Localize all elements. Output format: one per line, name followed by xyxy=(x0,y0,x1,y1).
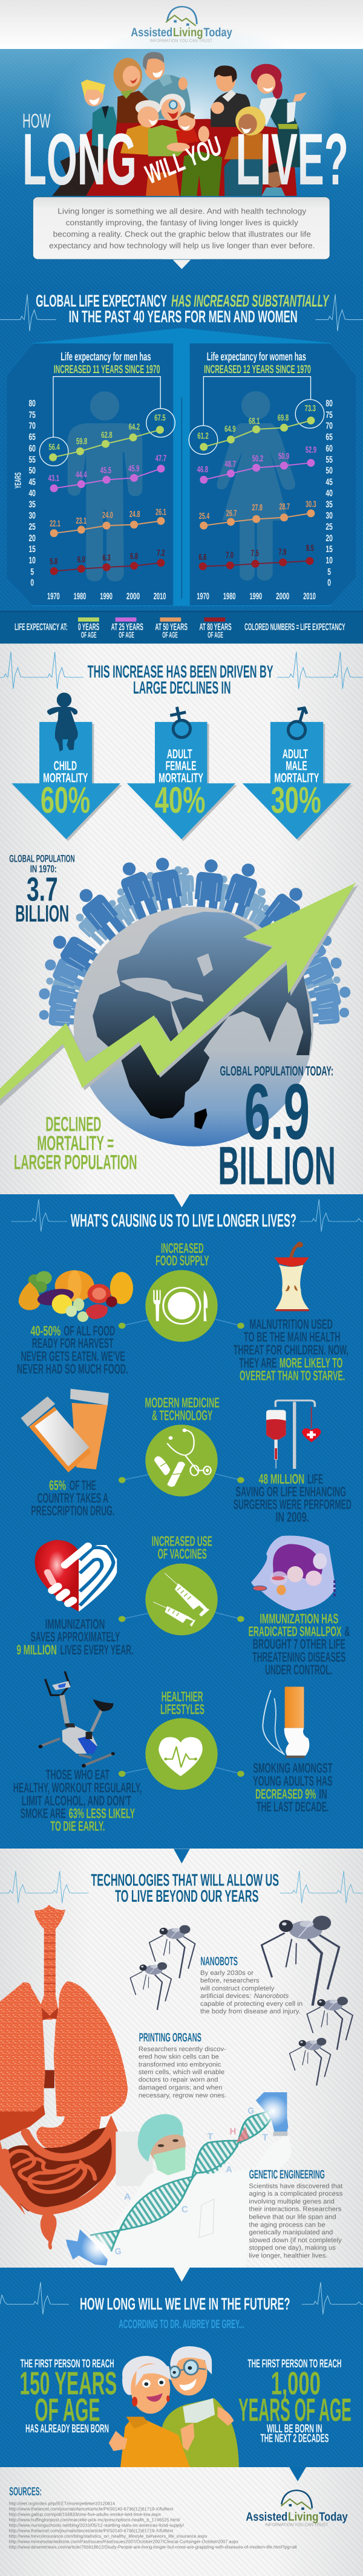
title: LONG xyxy=(22,118,137,200)
illustration: scientist with DNA helix: A xyxy=(226,2165,232,2174)
axis labels: 10 xyxy=(325,555,333,565)
icon: male symbol xyxy=(288,708,307,738)
series: age 80 xyxy=(50,548,165,575)
series: age 0: 64.2 xyxy=(129,422,140,432)
future and sources: THE FIRST PERSON TO REACH xyxy=(21,2357,114,2370)
panel: men chart: INCREASED 11 YEARS SINCE 1970 xyxy=(54,363,160,376)
icon: plate xyxy=(145,1270,218,1342)
population today xyxy=(218,1063,336,1196)
series: age 80: 6.8 xyxy=(130,551,138,561)
panel: vaccines: LIVES EVERY YEAR. xyxy=(60,1642,133,1657)
panel: adult male mortality: MALE xyxy=(286,758,307,773)
text block: 1,000 years xyxy=(238,2357,352,2445)
series: age 50: 30.3 xyxy=(306,499,316,509)
axis labels: 75 xyxy=(28,409,36,420)
panel: women chart xyxy=(189,350,324,581)
text block: genetic engineering: Scientists have discovered that xyxy=(249,2182,342,2190)
sources: http://www.trevcoinsurance.com/blog/statistics_on_healthy_lifestyle_behaviors_life_insurance.aspx xyxy=(9,2534,207,2539)
text block: genetic engineering: involving multiple genes and xyxy=(249,2197,335,2205)
text block: genetic engineering xyxy=(249,2168,342,2259)
panel: food supply: 40-50% xyxy=(31,1323,60,1338)
future and sources: 150 YEARS xyxy=(20,2365,117,2401)
panel: lifestyles: SMOKE ARE xyxy=(21,1806,66,1821)
axis labels: 20 xyxy=(325,533,333,543)
text block: printing organs: stem cells, which will enable xyxy=(139,2068,224,2075)
callout: declined mortality: DECLINED xyxy=(45,1113,101,1136)
logo: INFORMATION YOU CAN TRUST xyxy=(265,2522,328,2527)
text block: printing organs: ered how skin cells can be xyxy=(139,2053,219,2060)
axis labels: 1990 xyxy=(100,591,113,601)
axis labels: 45 xyxy=(28,476,36,487)
illustration: exercise bike xyxy=(39,1671,115,1768)
axis labels: 30 xyxy=(325,510,333,521)
text block: printing organs: doctors to repair worn and xyxy=(139,2076,218,2083)
panel: food supply: OF ALL FOOD xyxy=(64,1323,115,1338)
title xyxy=(22,109,348,200)
title: HOW xyxy=(22,109,51,132)
title: WILL YOU xyxy=(142,130,225,190)
future and sources xyxy=(9,2346,352,2549)
series: age 25: 44.4 xyxy=(76,470,87,480)
panel: adult female mortality: 40% xyxy=(155,779,205,821)
text block: nanobots: NANOBOTS xyxy=(200,1954,238,1968)
panel: child mortality: 60% xyxy=(41,779,90,821)
axis labels: 35 xyxy=(325,499,333,509)
sources: http://www.huffingtonpost.com/marcelle-pick-mc/prescriptions-health_b_1746525.html/ xyxy=(9,2517,180,2522)
axis labels xyxy=(13,398,333,601)
axis labels: 1970 xyxy=(47,591,60,601)
header and hero xyxy=(22,7,348,269)
heading xyxy=(88,662,273,698)
axis labels: 55 xyxy=(28,455,36,465)
series: age 50 xyxy=(199,499,316,530)
text block: printing organs xyxy=(139,2031,226,2099)
icon: cigarette xyxy=(263,1686,309,1758)
subheading: food supply xyxy=(155,1240,209,1269)
logo: INFORMATION YOU CAN TRUST xyxy=(150,38,212,43)
icon: woman silhouette xyxy=(217,391,295,581)
logo: Assisted xyxy=(246,2509,287,2523)
section background: sources xyxy=(0,2467,363,2576)
text block: nanobots xyxy=(200,1954,302,2015)
text block: genetic engineering: genetically manipulated and xyxy=(249,2228,333,2236)
series: age 0: 69.8 xyxy=(278,413,289,423)
section background: future xyxy=(0,2268,363,2467)
series: age 50: 26.7 xyxy=(226,509,237,518)
intro text box: Living longer is something we all desire. And with health technology xyxy=(57,207,306,215)
panel: food supply xyxy=(17,1242,348,1384)
axis labels: 1980 xyxy=(74,591,86,601)
series: age 80: 6.6 xyxy=(198,552,206,562)
text block: printing organs: transformed into embryonic xyxy=(139,2061,221,2068)
panel: medicine: IN 2009. xyxy=(275,1509,309,1525)
panel: lifestyles: LIMIT ALCOHOL, AND DON'T xyxy=(22,1793,131,1808)
legend: LIFE EXPECTANCY AT: xyxy=(15,622,68,633)
illustration: scientist with DNA helix: A xyxy=(124,2191,131,2202)
text block: nanobots: the body from disease and injury. xyxy=(200,2008,301,2015)
intro text box xyxy=(33,197,330,269)
intro text box: becoming a reality. Check out the graphic below that illustrates our life xyxy=(53,230,311,239)
population 1970: GLOBAL POPULATION xyxy=(9,853,75,864)
panel: medicine: & TECHNOLOGY xyxy=(152,1407,212,1423)
legend: OF AGE xyxy=(208,630,223,640)
text block: genetic engineering: slowed down (if not completely xyxy=(249,2236,342,2243)
logo xyxy=(246,2490,348,2527)
panel: adult male mortality: ADULT xyxy=(283,746,308,761)
icon: baby xyxy=(47,692,78,752)
text block: 1,000 years: 1,000 xyxy=(271,2365,321,2401)
illustration: fruit and vegetables xyxy=(19,1270,133,1322)
population 1970: IN 1970: xyxy=(30,864,57,874)
panel: adult male mortality xyxy=(243,708,353,841)
panel: adult female mortality: FEMALE xyxy=(166,758,196,773)
panel: lifestyles: HEALTHY, WORKOUT REGULARLY, xyxy=(13,1780,142,1795)
illustration: cell xyxy=(251,1536,336,1610)
axis labels: 40 xyxy=(325,488,333,498)
text block: printing organs: PRINTING ORGANS xyxy=(139,2031,201,2044)
series: age 0: 59.8 xyxy=(76,437,87,446)
panel: medicine: PRESCRIPTION DRUG. xyxy=(31,1503,114,1518)
panel: lifestyles: LIFESTYLES xyxy=(160,1701,204,1717)
series: age 50: 23.1 xyxy=(76,516,87,526)
panel: vaccines: IMMUNIZATION xyxy=(45,1616,105,1631)
legend xyxy=(0,611,363,643)
illustration: people around globe xyxy=(37,856,353,1028)
series: age 25 xyxy=(48,454,166,492)
panel: child mortality: CHILD xyxy=(54,758,77,773)
axis labels: 35 xyxy=(28,499,36,509)
life expectancy section xyxy=(0,291,363,643)
text block: nanobots: before, researchers xyxy=(200,1977,260,1984)
text block: genetic engineering: live longer, healthier lives. xyxy=(249,2252,327,2259)
chart backdrop xyxy=(7,328,356,606)
series: age 0: 62.8 xyxy=(101,431,113,440)
section background: technologies xyxy=(0,1849,363,2268)
series: age 80: 6.3 xyxy=(103,553,111,562)
panel: medicine: OF THE xyxy=(70,1478,96,1493)
icon: man silhouette xyxy=(68,391,142,581)
panel: food supply: THEY ARE xyxy=(239,1355,276,1370)
illustration: scientist with DNA helix: G xyxy=(247,2106,254,2116)
sources: http://www.thelancet.com/journals/lancet/article/PIIS0140-6736(12)61719-X/fulltext xyxy=(9,2506,173,2511)
series: age 0: 64.9 xyxy=(224,424,236,434)
illustration: family on a sofa xyxy=(52,52,307,196)
axis labels: 65 xyxy=(28,432,36,442)
text block: nanobots: By early 2030s or xyxy=(200,1969,253,1976)
subheading: food supply: INCREASED xyxy=(161,1240,204,1256)
text block: genetic engineering: believe that our life span and xyxy=(249,2213,336,2220)
sources: http://www.gallup.com/poll/156833/one-five-adults-smoke-tied-time-low.aspx xyxy=(9,2512,161,2517)
axis labels: 0 xyxy=(327,577,331,588)
subheading: vaccines xyxy=(152,1534,212,1562)
causes part 1 xyxy=(17,1242,352,1562)
axis labels: 60 xyxy=(325,443,333,454)
sources: http://ieet.org/index.php/IEET/more/pelletier20120814 xyxy=(9,2501,115,2506)
legend: AT 80 YEARS xyxy=(199,622,232,633)
series: age 50 xyxy=(50,507,166,537)
population 1970: 3.7 xyxy=(27,870,58,908)
axis labels: 0 xyxy=(30,577,34,588)
icon: stethoscope and pills xyxy=(145,1425,218,1497)
panel: medicine: LIFE xyxy=(307,1471,323,1486)
legend: OF AGE xyxy=(162,630,178,640)
causes part 1: INCREASED USE xyxy=(152,1534,212,1549)
series: age 25 xyxy=(197,445,316,484)
panel: vaccines: SAVES APPROXIMATELY xyxy=(31,1629,120,1645)
panel: vaccines xyxy=(17,1536,350,1677)
panel: men chart xyxy=(39,350,175,581)
text block: 150 years xyxy=(20,2357,117,2435)
axis labels: 2010 xyxy=(154,591,166,601)
sources: SOURCES: xyxy=(9,2485,42,2498)
sources: http://www.thelancet.com/journals/lancet/article/PIIS0140-6736(12)61719-X/fulltext xyxy=(9,2528,173,2533)
illustration: globe xyxy=(74,906,313,1147)
panel: medicine: 65% xyxy=(49,1478,66,1493)
axis labels: YEARS xyxy=(13,472,23,489)
axis labels: 1980 xyxy=(223,591,236,601)
icon: IV drip stand xyxy=(266,1400,321,1469)
text block: printing organs: necessary, regrow new ones. xyxy=(139,2092,226,2099)
illustration: scientist with DNA helix: T xyxy=(207,2132,213,2141)
series: age 80 xyxy=(198,544,314,570)
icon: heart with pulse xyxy=(145,1718,218,1790)
section background: header xyxy=(0,0,363,49)
series: age 80: 7.5 xyxy=(251,548,259,558)
axis labels: 70 xyxy=(325,421,333,431)
series: age 50: 28.7 xyxy=(279,502,290,512)
series: age 80: 8.5 xyxy=(306,544,314,553)
icon: syringes xyxy=(145,1564,218,1635)
illustration: pill bottles xyxy=(21,1389,109,1472)
panel: adult male mortality: 30% xyxy=(271,779,321,821)
series: age 25: 50.9 xyxy=(278,451,289,461)
legend: 0 YEARS xyxy=(78,622,99,633)
panel: lifestyles: 63% LESS LIKELY xyxy=(69,1806,135,1821)
causes part 2 xyxy=(13,1536,350,1834)
illustration: digestive organs xyxy=(0,2092,127,2249)
panel: child mortality: MORTALITY xyxy=(43,770,88,785)
text block: genetic engineering: the aging process can be xyxy=(249,2221,325,2228)
text block: nanobots: will construct completely xyxy=(200,1985,274,1992)
heading xyxy=(36,291,330,326)
series: age 0: 73.3 xyxy=(305,403,316,414)
series: age 25: 43.1 xyxy=(48,473,59,483)
population results xyxy=(0,1063,363,1269)
section background: mortality and population xyxy=(0,643,363,1194)
series: age 0: 61.2 xyxy=(197,431,209,441)
panel: medicine: 48 MILLION xyxy=(259,1471,304,1486)
series: age 80: 6.0 xyxy=(77,555,85,564)
panel: food supply: NEVER GETS EATEN. WE'VE xyxy=(21,1348,125,1364)
text block: nanobots: artificial devices: xyxy=(200,1992,251,1999)
illustration: trachea and lungs xyxy=(0,1905,128,2116)
axis labels: 2000 xyxy=(276,591,289,601)
legend: OF AGE xyxy=(81,630,97,640)
population results: FOOD SUPPLY xyxy=(155,1253,209,1269)
text block: printing organs: Researchers recently discov- xyxy=(139,2045,226,2052)
series: age 25: 45.9 xyxy=(128,464,139,473)
axis labels: 40 xyxy=(28,488,36,498)
series: age 50: 26.1 xyxy=(155,507,166,517)
callout: declined mortality xyxy=(14,1113,137,1174)
icon: gloved hands xyxy=(66,2092,288,2266)
axis labels: 1970 xyxy=(197,591,209,601)
legend: AT 50 YEARS xyxy=(155,622,188,633)
text block: printing organs: damaged organs; and when xyxy=(139,2084,222,2091)
axis labels: 55 xyxy=(325,455,333,465)
icon: apple core xyxy=(274,1242,309,1311)
series: age 0: 68.1 xyxy=(249,416,260,426)
axis labels: 25 xyxy=(28,522,36,532)
panel: lifestyles: THOSE WHO EAT xyxy=(46,1767,110,1783)
axis labels: 60 xyxy=(28,443,36,454)
series: age 80: 7.2 xyxy=(157,548,165,558)
series: age 25: 46.8 xyxy=(197,464,208,474)
axis labels: 5 xyxy=(327,567,331,577)
axis labels: 80 xyxy=(28,398,36,409)
sources: http://www.deseretnews.com/article/765618612/Study-People-are-living-longer-but-more-are-grappling-with-diseases-of-modern-life.html?pg=all xyxy=(9,2545,297,2549)
heading: LARGE DECLINES IN xyxy=(133,678,231,698)
axis labels: 70 xyxy=(28,421,36,431)
panel: men chart: Life expectancy for men has xyxy=(60,350,151,363)
panel: food supply: NEVER HAD SO MUCH FOOD. xyxy=(17,1361,128,1377)
series: age 25: 50.2 xyxy=(252,454,263,463)
logo: Living xyxy=(288,2509,319,2523)
panel: adult female mortality xyxy=(127,707,237,841)
panel: lifestyles xyxy=(13,1671,332,1834)
causes part 1: OF VACCINES xyxy=(158,1546,207,1562)
panel: lifestyles: TO DIE EARLY. xyxy=(50,1818,105,1834)
panel: adult male mortality: MORTALITY xyxy=(274,770,319,785)
axis labels: 2010 xyxy=(303,591,316,601)
text block: genetic engineering: aging is a complicated process xyxy=(249,2190,342,2197)
axis labels: 80 xyxy=(325,398,333,409)
illustration: scientist with DNA helix: H xyxy=(230,2126,236,2136)
illustration: scientist with DNA helix: T xyxy=(262,2132,268,2142)
panel: medicine: MODERN MEDICINE xyxy=(145,1394,220,1410)
series: age 25: 48.7 xyxy=(225,459,236,469)
series: age 50: 25.4 xyxy=(199,511,209,521)
text block: genetic engineering: their interactions. Researchers xyxy=(249,2205,341,2213)
icon: female symbol xyxy=(170,707,191,738)
series: age 0 xyxy=(197,403,316,451)
panel: adult female mortality: ADULT xyxy=(167,746,192,761)
technologies part 1 xyxy=(0,1849,363,2116)
series: age 25: 45.5 xyxy=(100,466,111,475)
legend: OF AGE xyxy=(119,630,134,640)
sources xyxy=(9,2485,297,2549)
axis labels: 2000 xyxy=(126,591,140,601)
logo: Today xyxy=(203,25,232,39)
axis labels: 5 xyxy=(30,567,34,577)
illustration: scientist with DNA helix: C xyxy=(182,2205,188,2214)
series: age 0 xyxy=(48,413,166,461)
logo: Living xyxy=(173,25,203,39)
legend: AT 25 YEARS xyxy=(111,622,143,633)
axis labels: 50 xyxy=(28,466,36,476)
population 1970: BILLION xyxy=(15,900,69,926)
logo xyxy=(131,7,232,43)
axis labels: 50 xyxy=(325,466,333,476)
axis labels: 10 xyxy=(28,555,36,565)
series: age 80: 7.9 xyxy=(278,547,286,557)
axis labels: 1990 xyxy=(249,591,262,601)
panel: lifestyles: IN xyxy=(319,1786,327,1801)
panel: child mortality xyxy=(11,692,122,841)
panel: vaccines: 9 MILLION xyxy=(17,1642,57,1657)
axis labels: 75 xyxy=(325,409,333,420)
panel: medicine: COUNTRY TAKES A xyxy=(38,1491,108,1506)
section background: hero and life expectancy xyxy=(0,49,363,643)
axis labels: 65 xyxy=(325,432,333,442)
illustration: nanobots xyxy=(130,1916,353,2086)
icon: heart with bandage stripes xyxy=(35,1540,117,1612)
intro text box: expectancy and how technology will help us live longer than ever before. xyxy=(49,241,315,250)
mortality and population section xyxy=(0,652,363,1147)
series: age 25: 47.7 xyxy=(155,454,166,463)
icon: rising green arrow xyxy=(0,883,358,1106)
population results: LARGER POPULATION xyxy=(14,1151,137,1174)
series: age 0: 56.4 xyxy=(48,442,60,452)
illustration: elderly couple xyxy=(109,2346,239,2467)
axis labels: 30 xyxy=(28,510,36,521)
series: age 50: 24.8 xyxy=(129,509,140,519)
axis labels: 45 xyxy=(325,476,333,487)
intro text box: constantly improving, the fantasy of living longer lives is quickly xyxy=(66,218,298,227)
sources: http://www.nursingschools.net/blog/2010/05/12-startling-stats-on-americas-food-supply/ xyxy=(9,2523,184,2528)
axis labels: 15 xyxy=(325,544,333,554)
series: age 25: 52.9 xyxy=(306,445,316,455)
logo: Assisted xyxy=(131,25,172,39)
text block: nanobots: capable of protecting every cell in xyxy=(200,2000,302,2007)
series: age 50: 27.8 xyxy=(252,503,263,512)
heading: GLOBAL LIFE EXPECTANCY xyxy=(36,291,167,310)
logo: Today xyxy=(319,2509,348,2523)
text block: nanobots: Nanorobots xyxy=(254,1992,289,1999)
text block: 150 years: HAS ALREADY BEEN BORN xyxy=(25,2422,109,2435)
technologies part 2 xyxy=(0,2092,363,2330)
panel: medicine xyxy=(21,1389,352,1525)
panel: lifestyles: HEALTHIER xyxy=(162,1688,203,1704)
text block: genetic engineering: stopped one day), making us xyxy=(249,2244,336,2251)
section background: causes xyxy=(0,1194,363,1849)
illustration: scientist with DNA helix: G xyxy=(115,2246,122,2256)
series: age 50: 24.0 xyxy=(102,510,113,520)
callout: declined mortality: MORTALITY = xyxy=(37,1131,114,1154)
text block: 150 years: OF AGE xyxy=(34,2392,100,2428)
series: age 0: 67.5 xyxy=(154,413,166,423)
series: age 80: 5.8 xyxy=(50,556,57,567)
series: age 50: 22.1 xyxy=(50,519,60,529)
panel: adult female mortality: MORTALITY xyxy=(159,770,203,785)
axis labels: 15 xyxy=(28,544,36,554)
series: age 80: 7.0 xyxy=(226,550,234,560)
illustration: scientist with DNA helix xyxy=(66,2092,291,2268)
sources: http://www.minnesotamedicine.com/PastIssues/PastIssues2007/October2007/Clinical-Curtsinger-October2007.aspx xyxy=(9,2539,238,2544)
population 1970 xyxy=(9,853,75,926)
heading xyxy=(91,1870,279,1905)
panel: food supply: READY FOR HARVEST xyxy=(32,1336,113,1351)
text: & xyxy=(344,1624,350,1639)
axis labels: 25 xyxy=(325,522,333,532)
axis labels: 20 xyxy=(28,533,36,543)
